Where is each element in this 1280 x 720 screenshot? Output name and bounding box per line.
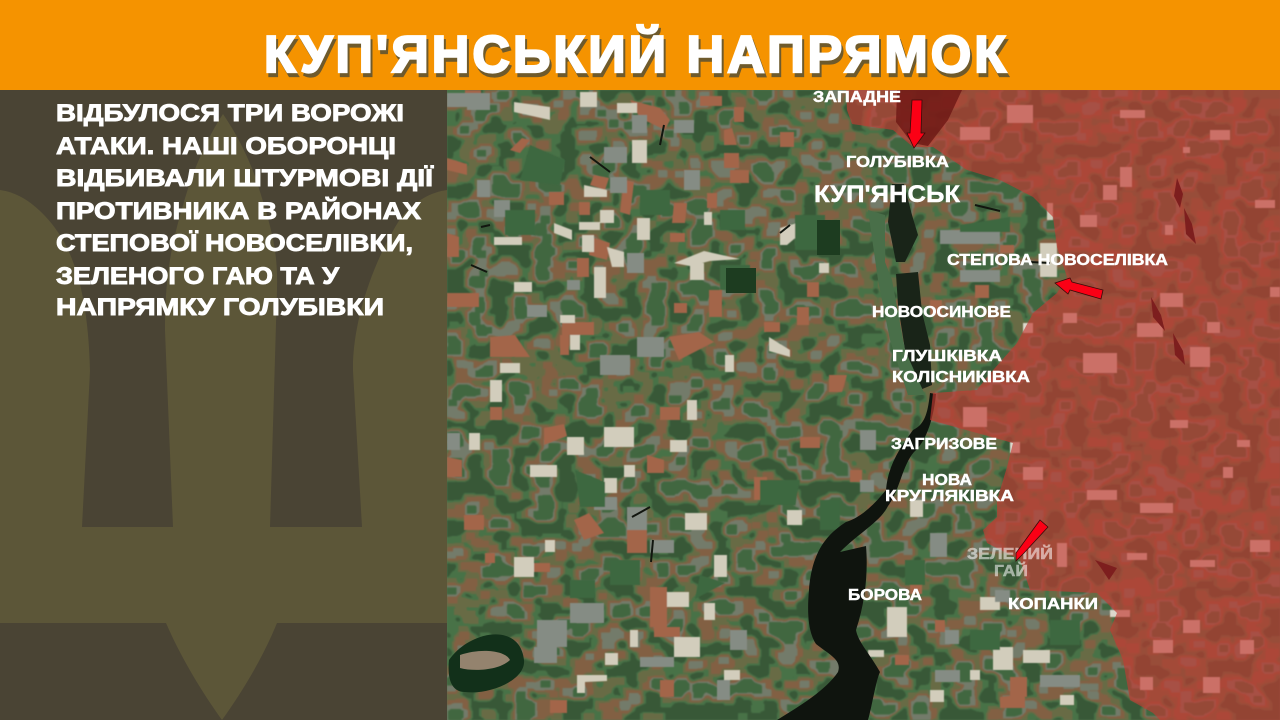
arrow: attack toward Zelenyi Hai — [1016, 520, 1048, 561]
text block: summary: ВІДБИВАЛИ ШТУРМОВІ ДІЇ — [56, 165, 435, 192]
label: Зелений Гай: ГАЙ — [994, 562, 1028, 580]
label: Колісниківка: КОЛІСНИКІВКА — [892, 369, 1030, 386]
title: КУП'ЯНСЬКИЙ НАПРЯМОК — [264, 25, 1006, 84]
map: river and forest — [449, 125, 1050, 720]
label: Кругляківка: КРУГЛЯКІВКА — [885, 488, 1014, 505]
icon: trident background emblem — [0, 114, 447, 720]
panel: left text panel — [0, 90, 447, 720]
map: occupied territory overlay — [846, 90, 1280, 720]
label: Зелений Гай — [967, 545, 1053, 580]
text block: summary: СТЕПОВОЇ НОВОСЕЛІВКИ, — [56, 230, 413, 257]
label: Загризове: ЗАГРИЗОВЕ — [891, 436, 997, 453]
label: Западне: ЗАПАДНЕ — [813, 89, 901, 106]
arrow: attack toward Stepova Novoselivka — [1055, 278, 1103, 299]
map: dark red attack zone — [896, 90, 962, 146]
label: Новоосинове: НОВООСИНОВЕ — [872, 304, 1011, 321]
text block: summary — [56, 100, 435, 321]
panel: satellite map — [447, 90, 1280, 720]
label: Зелений Гай: ЗЕЛЕНИЙ — [967, 545, 1053, 563]
text block: summary: ПРОТИВНИКА В РАЙОНАХ — [56, 197, 421, 225]
map: east fields under occupied overlay — [960, 105, 1280, 693]
label: Куп'янськ: КУП'ЯНСЬК — [814, 181, 960, 208]
label: Степова Новоселівка: СТЕПОВА НОВОСЕЛІВКА — [947, 252, 1168, 269]
text block: summary: ЗЕЛЕНОГО ГАЮ ТА У — [56, 263, 340, 290]
label: Нова: НОВА — [922, 472, 972, 489]
label: Борова: БОРОВА — [848, 587, 922, 604]
text block: summary: НАПРЯМКУ ГОЛУБІВКИ — [56, 294, 384, 321]
map: farmland fields — [447, 90, 1280, 713]
label: Копанки: КОПАНКИ — [1008, 596, 1098, 613]
header bar — [0, 0, 1280, 90]
label: Глушківка: ГЛУШКІВКА — [892, 348, 1002, 365]
text block: summary: АТАКИ. НАШІ ОБОРОНЦІ — [56, 133, 396, 160]
label: Голубівка: ГОЛУБІВКА — [846, 154, 949, 171]
text block: summary: ВІДБУЛОСЯ ТРИ ВОРОЖІ — [56, 100, 404, 127]
arrow: attack toward Holubivka — [907, 100, 925, 148]
